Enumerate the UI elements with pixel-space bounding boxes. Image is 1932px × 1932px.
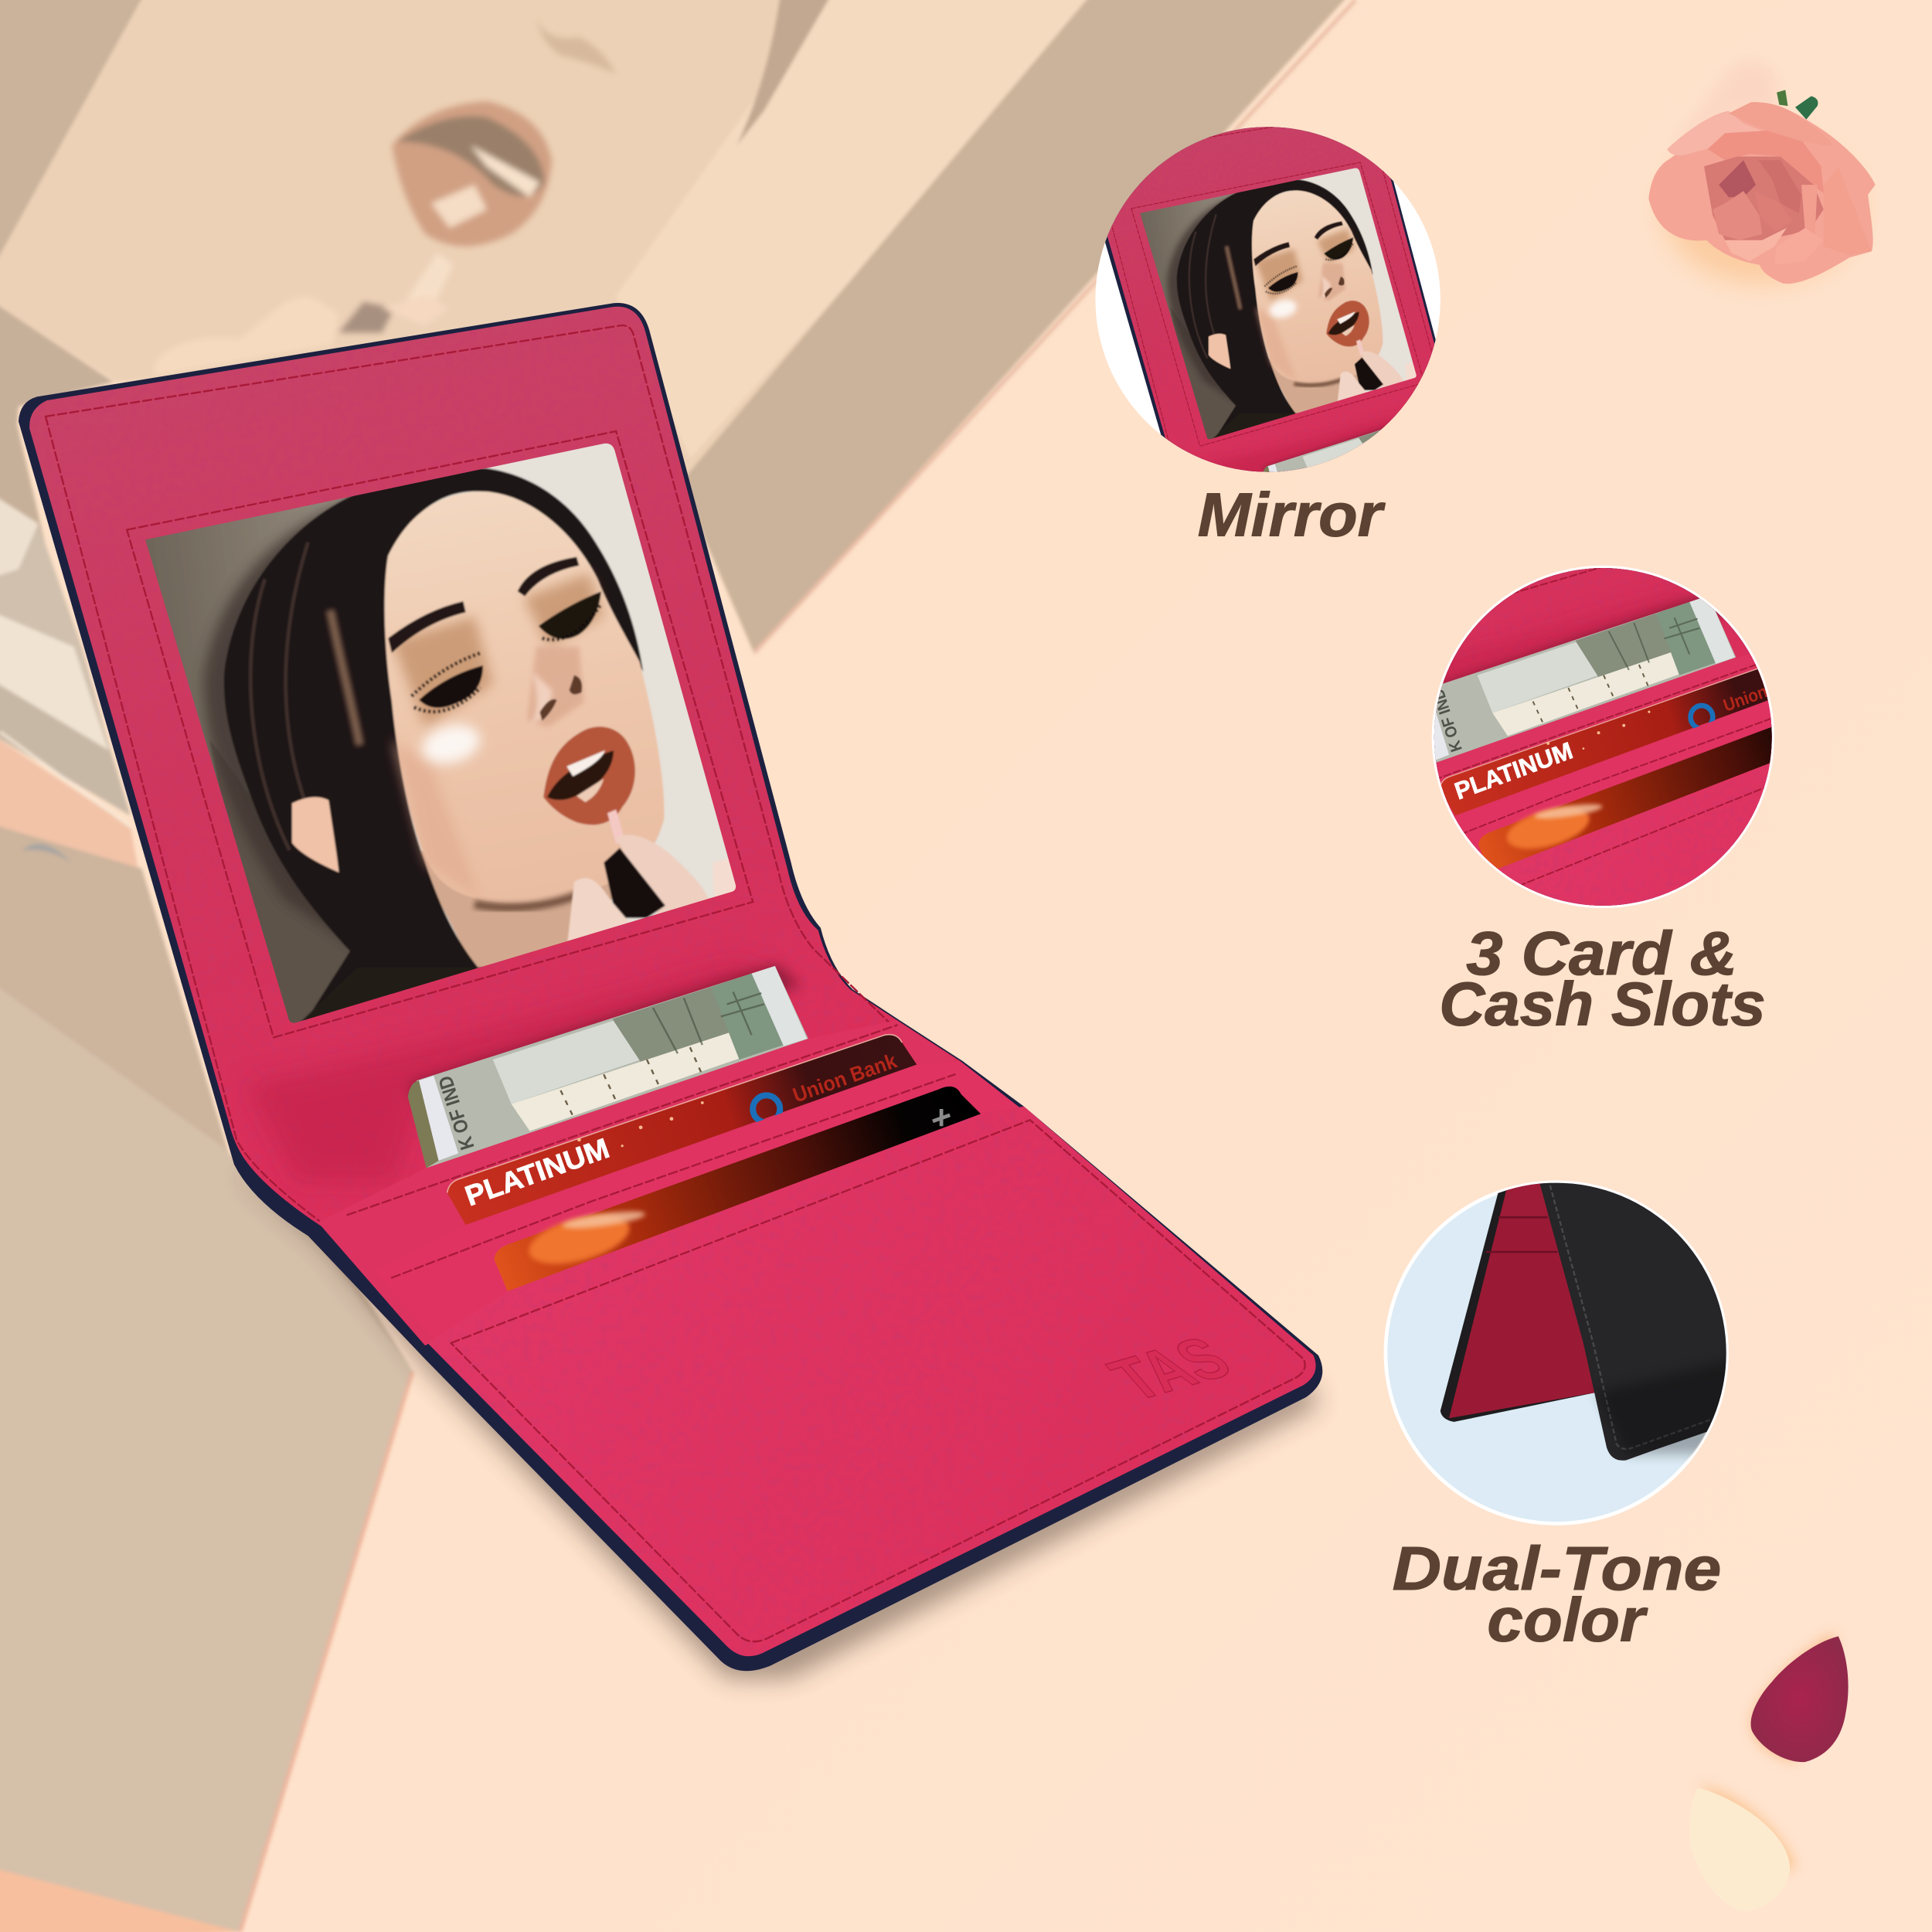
panel: dual-tone colour circle xyxy=(1383,1180,1750,1526)
icon: rose xyxy=(1648,61,1876,284)
icon: red makeup sponge xyxy=(1751,1631,1849,1764)
faded fingers and lipstick xyxy=(154,253,454,376)
card text: platinum: PLATINUM xyxy=(461,1132,613,1212)
label: 3 Card and Cash Slots xyxy=(1439,919,1766,1039)
panel: card and cash slots circle: K OF IND xyxy=(1429,686,1466,754)
icon: cream makeup sponge xyxy=(1689,1783,1797,1911)
faded lips xyxy=(392,101,552,247)
label: Dual-Tone color: Dual-Tone xyxy=(1393,1534,1721,1603)
panel: mirror feature circle xyxy=(1095,127,1440,472)
embossed logo: TAS xyxy=(1095,1325,1246,1413)
panel: card and cash slots circle: Union Bank xyxy=(1721,666,1811,716)
label: 3 Card and Cash Slots: Cash Slots xyxy=(1439,970,1766,1039)
main wallet open with mirror and slots xyxy=(19,303,1322,1671)
faded background wallet photo xyxy=(0,0,1355,1932)
label: Dual-Tone color xyxy=(1393,1534,1721,1655)
label: Dual-Tone color: color xyxy=(1487,1586,1648,1655)
label: Mirror: Mirror xyxy=(1198,481,1386,549)
panel: card and cash slots circle xyxy=(1431,566,1774,909)
label: 3 Card and Cash Slots: 3 Card & xyxy=(1466,919,1737,988)
panel: card and cash slots circle: PLATINUM xyxy=(1451,737,1576,805)
note text: K OF IND xyxy=(434,1073,479,1152)
wallet drop shadow xyxy=(234,1171,1318,1679)
card text: bank: Union Bank xyxy=(790,1048,900,1107)
